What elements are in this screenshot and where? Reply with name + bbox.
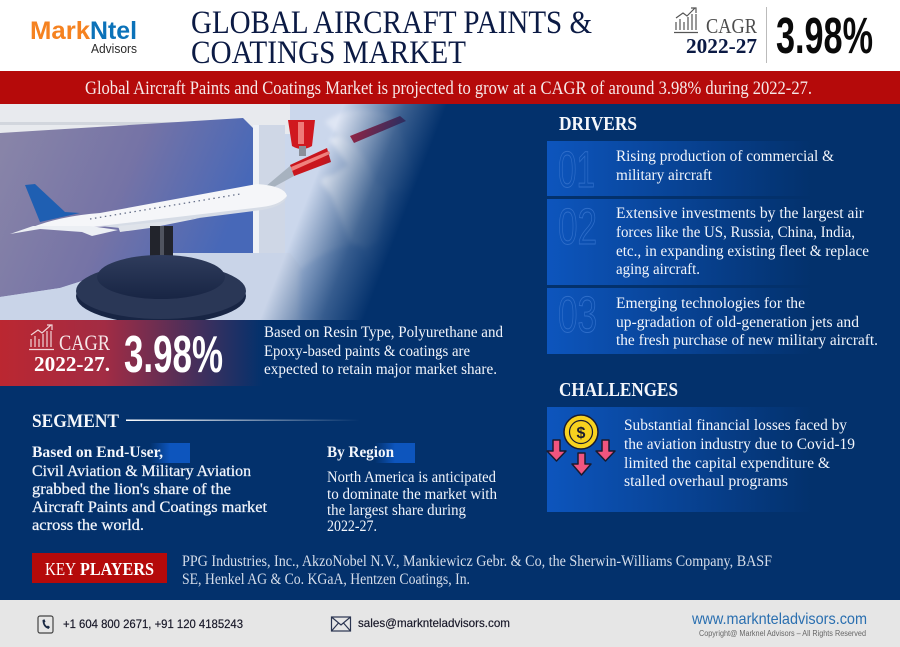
red banner: [0, 71, 900, 104]
icon: phone: [38, 616, 53, 633]
airbrush: [350, 116, 406, 143]
key players label: [32, 553, 167, 583]
text block: end-user: across the world.: [32, 517, 144, 534]
driver 03: 03: [558, 286, 597, 343]
text block: resin type: expected to retain major market share.: [264, 361, 497, 378]
CAGR label: [686, 14, 757, 58]
panel: challenges: the aviation industry due to Covid-19: [624, 436, 855, 453]
title: COATINGS MARKET: [191, 35, 466, 71]
driver 01: [547, 141, 900, 198]
text block: end-user: Based on End-User,: [32, 444, 163, 461]
key players list: PPG Industries, Inc., AkzoNobel N.V., Mankiewicz Gebr. & Co, the Sherwin-Williams Company, BASF: [182, 553, 772, 570]
text block: resin type: Epoxy-based paints & coatings are: [264, 343, 470, 360]
red banner: Global Aircraft Paints and Coatings Market is projected to grow at a CAGR of around 3.98% during 2022-27.: [85, 79, 812, 99]
key players label: KEY: [45, 559, 76, 579]
icon: envelope: [332, 617, 350, 631]
panel: challenges: Substantial financial losses faced by: [624, 417, 847, 434]
copyright: Copyright@ Marknel Advisors – All Rights Reserved: [699, 629, 866, 638]
icon: coin with falling arrows: [547, 415, 615, 475]
CAGR band: 3.98%: [124, 326, 223, 384]
icon: growth chart white: [29, 325, 54, 350]
driver 02: forces like the US, Russia, China, India,: [616, 224, 855, 241]
driver 03: up-gradation of old-generation jets and: [616, 314, 859, 331]
aeroplane: [25, 184, 80, 222]
CAGR band: 2022-27.: [34, 352, 110, 376]
heading: drivers: DRIVERS: [559, 113, 637, 135]
text block: end-user: Civil Aviation & Military Aviation: [32, 463, 251, 480]
driver 03: [547, 286, 900, 354]
panel: drivers: [547, 113, 900, 354]
photo: model aircraft being spray painted: [0, 104, 450, 324]
driver 02: [547, 198, 900, 285]
key players list: SE, Henkel AG & Co. KGaA, Hentzen Coatings, In.: [182, 571, 470, 588]
CAGR label: 2022-27: [686, 34, 757, 58]
CAGR label: CAGR: [706, 14, 757, 38]
driver 01: 01: [558, 141, 595, 198]
text block: resin type: [264, 324, 503, 378]
driver 02: Extensive investments by the largest air: [616, 205, 865, 222]
panel: challenges: [547, 379, 900, 512]
photo fade overlay: [264, 104, 450, 320]
key players list: [182, 553, 772, 588]
display stand: [150, 226, 173, 256]
hand in glove: [302, 110, 388, 312]
heading: challenges: CHALLENGES: [559, 379, 678, 401]
key players label: PLAYERS: [80, 559, 154, 579]
text block: end-user: grabbed the lion's share of the: [32, 481, 231, 498]
text block: by region: the largest share during: [327, 502, 466, 519]
text block: by region: to dominate the market with: [327, 486, 497, 503]
title: GLOBAL AIRCRAFT PAINTS &: [191, 5, 592, 41]
logo: MarkNtel Advisors: Advisors: [91, 41, 137, 56]
CAGR band: CAGR: [59, 330, 110, 355]
text block: by region: 2022-27.: [327, 518, 377, 535]
logo: MarkNtel Advisors: Ntel: [90, 17, 137, 45]
driver 03: the fresh purchase of new military aircraft.: [616, 332, 878, 349]
heading: segment: SEGMENT: [32, 411, 119, 432]
text block: end-user: [32, 444, 268, 534]
website: www.marknteladvisors.com: [691, 611, 867, 628]
footer: [0, 600, 900, 647]
text block: resin type: Based on Resin Type, Polyurethane and: [264, 324, 503, 341]
driver 01: Rising production of commercial &: [616, 148, 835, 165]
driver 02: aging aircraft.: [616, 261, 700, 278]
logo: MarkNtel Advisors: Mark: [30, 17, 90, 45]
panel: segment: [32, 411, 497, 535]
text block: by region: [327, 444, 497, 535]
panel: challenges: limited the capital expenditure &: [624, 455, 831, 472]
driver 01: military aircraft: [616, 167, 713, 184]
icon: coin with falling arrows: $: [577, 425, 586, 442]
logo: MarkNtel Advisors: [30, 17, 137, 56]
text block: by region: By Region: [327, 444, 394, 461]
CAGR band: [0, 320, 262, 386]
driver 02: 02: [558, 198, 597, 255]
text block: end-user: Aircraft Paints and Coatings market: [32, 499, 268, 516]
driver 02: etc., in expanding existing fleet & replace: [616, 243, 869, 260]
header band: [0, 0, 900, 71]
email: sales@marknteladvisors.com: [358, 616, 510, 630]
title: [191, 5, 592, 71]
key players: [32, 553, 772, 588]
text block: by region: North America is anticipated: [327, 469, 496, 486]
driver 03: Emerging technologies for the: [616, 295, 805, 312]
phone numbers: +1 604 800 2671, +91 120 4185243: [63, 617, 243, 631]
panel: challenges: stalled overhaul programs: [624, 473, 788, 490]
icon: growth chart: [674, 8, 698, 32]
